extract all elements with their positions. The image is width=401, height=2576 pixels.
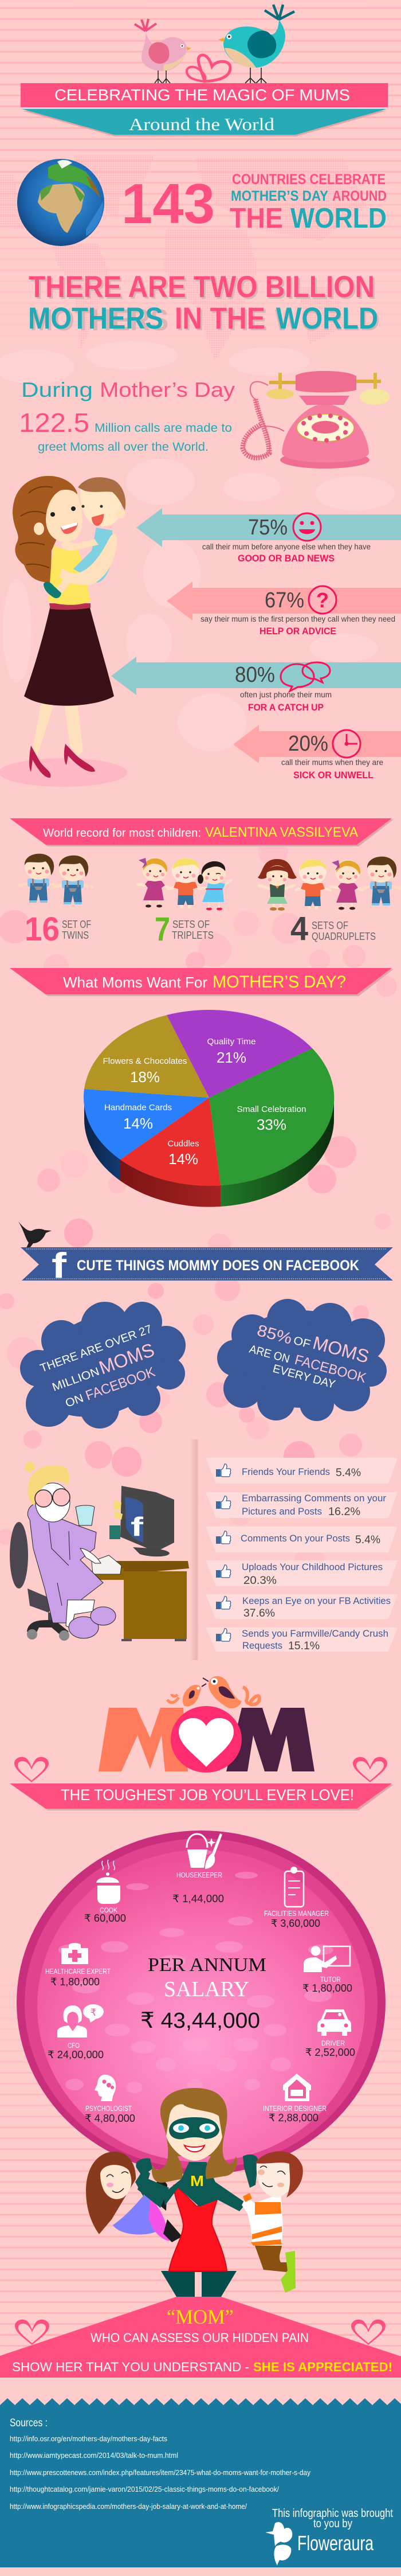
teal suit [163,2162,246,2211]
pie labels: 33% [257,1116,286,1133]
cloud: 27 million moms: FACEBOOK [84,1364,157,1404]
ribbon: world record [10,818,394,846]
statistic: 16 sets of twins: TWINS [62,930,89,941]
job: cook [84,1860,126,1924]
item: embarrassing comments: 16.2% [328,1506,360,1518]
bottom pyramid banner: SHE IS APPRECIATED! [253,2360,392,2374]
pie labels: Quality Time [207,1037,255,1047]
slice: cuddles [120,1098,221,1186]
cloud: 85 percent of moms: ARE ON [248,1343,291,1365]
icon: bottom heart right [351,2320,386,2345]
statistic: 16 sets of twins: SET OF [62,919,91,930]
pie labels: 14% [168,1150,198,1168]
pie labels [103,1037,306,1168]
letter M: M [190,2172,204,2189]
item: uploads childhood pictures: Uploads Your Childhood Pictures [242,1562,383,1572]
belt [49,603,91,610]
text block: mother's day calls: During [21,378,93,401]
pen cup [109,1525,120,1539]
skirt [24,606,114,706]
ribbon: facebook heading: f [52,1246,66,1286]
job: facilities manager: ₹ 3,60,000 [271,1918,320,1929]
shoes shadow [0,758,127,787]
job: interior designer [263,2074,327,2124]
job: facilities manager: FACILITIES MANAGER [264,1909,329,1918]
sources list: http://www.prescottenews.com/index.php/features/item/23475-what-do-moms-want-for-mother-s-day [10,2468,310,2477]
item: friends your friends: 5.4% [336,1467,361,1479]
slice: quality time [167,1010,312,1098]
callout: 20 percent [233,725,401,780]
item: embarrassing comments: Pictures and Posts [242,1506,322,1517]
job: tutor: ₹ 1,80,000 [302,1982,352,1994]
long hair [152,2088,237,2183]
job: facilities manager [264,1867,329,1929]
job: healthcare expert: ₹ 1,80,000 [50,1976,100,1988]
statistic: 143 countries: AROUND [332,188,387,204]
robe folds [49,1523,70,1606]
small bird [167,1684,206,1706]
pie side walls [84,1098,334,1207]
chair [10,1522,69,1641]
job: CFO: ₹ [91,2007,96,2018]
monitor: f [131,1512,144,1541]
ribbon: what moms want: What Moms Want For [63,974,207,991]
statistic: 4 sets of quadruplets: QUADRUPLETS [312,931,376,942]
sources list: http://www.iamtypecast.com/2014/03/talk-to-mum.html [10,2451,178,2460]
cloud: 85 percent of moms: MOMS [310,1332,371,1367]
ribbon: what moms want: MOTHER’S DAY? [213,973,346,992]
callout: 80 percent: often just phone their mum [240,690,332,699]
child's head [80,479,121,526]
item: uploads childhood pictures [206,1560,398,1587]
brand credit: Floweraura [297,2531,374,2555]
salary total: ₹ 43,44,000 [140,2009,260,2033]
icon: globe [17,159,104,246]
job: CFO: CFO [68,2042,80,2050]
job: cook: ₹ 60,000 [84,1913,126,1924]
cloud: 27 million moms [19,1294,187,1435]
salary total [140,1954,266,2033]
O with heart [171,1706,242,1773]
statistic: 4 sets of quadruplets [290,910,376,947]
item: keeps an eye [206,1594,398,1619]
callout: 75 percent: 75% [248,516,288,540]
right M [226,1708,314,1771]
statistic: 143 countries: WORLD [290,203,387,234]
arms [60,534,117,585]
job: tutor [302,1946,352,1994]
ribbon: facebook heading [21,1246,393,1286]
subtitle ribbon [22,109,387,136]
hair [13,476,77,583]
panel: facebook list [206,1458,398,1652]
disc texture [58,1849,333,2093]
callout: 75 percent [136,508,401,564]
callout: 67 percent [167,581,401,637]
statistic: 143 countries: MOTHER’S DAY [231,188,328,204]
item: comments on your posts: 5.4% [355,1534,380,1546]
item: embarrassing comments [206,1492,398,1518]
job: housekeeper: ₹ 1,44,000 [172,1893,224,1904]
item: sends requests [206,1627,398,1652]
mask [169,2117,219,2139]
keyboard [92,1555,121,1574]
statistic: 143 countries: THE [230,203,283,234]
job: interior designer: ₹ 2,88,000 [269,2112,319,2124]
callout: 67 percent: HELP OR ADVICE [260,626,336,637]
icon: clock [333,730,360,758]
sources list: http://www.infographicspedia.com/mothers-day-job-salary-at-work-and-at-home/ [10,2502,247,2511]
pie labels: Handmade Cards [104,1103,172,1113]
sources list: Sources : [10,2417,48,2429]
bottom pyramid banner: WHO CAN ASSESS OUR HIDDEN PAIN [91,2331,309,2345]
statistic: 7 sets of triplets: 7 [155,911,170,948]
job: healthcare expert: HEALTHCARE EXPERT [45,1967,111,1976]
cloud: 27 million moms: ON [64,1392,85,1410]
glasses [35,1489,70,1507]
smile [184,2145,205,2152]
shirt [48,545,91,605]
robe [27,1504,103,1623]
illustration: triplets [137,857,231,911]
statistic: 4 sets of quadruplets: SETS OF [312,920,348,931]
job: driver [305,2009,355,2058]
callout: 20 percent: SICK OR UNWELL [293,770,374,780]
cloud: 85 percent of moms: OF [292,1334,312,1351]
arm left [137,2176,169,2208]
icon: question mark [309,586,336,614]
item: friends your friends: Friends Your Friends [242,1466,330,1477]
footer panel [0,2398,401,2567]
job: cook: COOK [100,1906,117,1914]
job: housekeeper: HOUSEKEEPER [176,1871,222,1879]
icon: heart right [353,1757,387,1782]
job: driver: ₹ 2,52,000 [305,2047,355,2058]
legs and shoes [29,702,95,778]
callout: 80 percent: 80% [235,663,275,687]
dotted world map [0,155,367,361]
child's body [73,528,113,583]
headline: two billion mothers: THERE ARE TWO BILLION [29,270,375,304]
ribbon: facebook heading: CUTE THINGS MOMMY DOES ON FACEBOOK [77,1258,359,1274]
item: keeps an eye: 37.6% [243,1607,275,1619]
statistic: 143 countries: 143 [121,172,215,235]
icon: heart left [14,1757,49,1782]
brand credit: to you by [313,2518,352,2530]
item: sends requests: 15.1% [288,1640,320,1652]
sources list: http://info.osr.org/en/mothers-day/mothers-day-facts [10,2434,167,2443]
bottom pyramid banner: SHOW HER THAT YOU UNDERSTAND - [12,2360,249,2374]
ribbon: what moms want [10,968,394,996]
subtitle ribbon: Around the World [129,114,275,134]
callout: 80 percent [111,657,401,713]
pink bird [135,19,191,83]
girl on the left [86,2152,182,2242]
ribbon: toughest job: THE TOUGHEST JOB YOU’LL EVER LOVE! [61,1786,354,1804]
headline: two billion mothers: IN THE [175,302,265,335]
text block: mother's day calls [19,378,235,454]
callout: 67 percent: say their mum is the first person they call when they need [200,615,395,623]
job: psychologist: ₹ 4,80,000 [85,2113,135,2124]
job: psychologist: PSYCHOLOGIST [85,2104,132,2113]
icon: chat bubbles [281,662,330,691]
child's leg and shoe [56,573,76,594]
bunny slippers [69,1607,116,1638]
pie labels: Small Celebration [237,1104,306,1114]
red dress and legs [161,2185,237,2297]
text block: mother's day calls: 122.5 [19,408,89,438]
illustration: two birds and hearts [135,5,294,83]
cloud: 27 million moms: MILLION [50,1365,101,1394]
statistic: 4 sets of quadruplets: 4 [290,910,308,947]
desk [92,1561,189,1641]
face [166,2104,222,2161]
sources list [10,2417,310,2511]
callout: 67 percent: 67% [265,588,304,612]
statistic: 16 sets of twins [25,911,91,948]
callout: 20 percent: call their mums when they are [281,758,383,767]
icon: pink telephone [243,371,390,469]
salary total: PER ANNUM [148,1954,266,1976]
job: CFO [48,2004,104,2060]
job: housekeeper [172,1833,224,1904]
cloud: 85 percent of moms: FACEBOOK [293,1352,368,1386]
face [46,490,82,542]
illustration: quadruplets [258,857,400,911]
title banner [21,83,388,107]
pie labels: 18% [130,1068,160,1086]
item: sends requests: Requests [242,1640,282,1651]
item: keeps an eye: Keeps an Eye on your FB Activities [242,1595,391,1606]
boy on the right [242,2151,303,2293]
item: embarrassing comments: Embarrassing Comments on your [242,1493,386,1504]
statistic: 7 sets of triplets: SETS OF [172,919,210,930]
divider shadow [189,1439,199,1660]
slice: small celebration [209,1048,334,1185]
statistic: 7 sets of triplets: TRIPLETS [172,930,214,941]
ribbon: world record: VALENTINA VASSILYEVA [205,825,358,840]
job: psychologist [85,2075,135,2124]
statistic: 143 countries [121,171,387,235]
large bird [203,1676,260,1708]
ribbon: world record: World record for most children: [43,827,201,840]
callout: 80 percent: FOR A CATCH UP [248,702,324,713]
headline: two billion mothers: MOTHERS [28,302,163,335]
item: sends requests: Sends you Farmville/Candy Crush [242,1628,388,1639]
sources list: http://thoughtcatalog.com/jamie-varon/2015/02/25-classic-things-moms-do-on-facebook/ [10,2485,279,2493]
monitor [120,1486,174,1556]
teal bird [218,5,294,83]
mug [76,1505,95,1525]
salary total: SALARY [164,1977,249,2001]
headline: two billion mothers: WORLD [276,302,378,335]
icon: black bird [18,1221,52,1248]
background stripes bottom [0,2028,401,2356]
grandma head [36,1483,70,1522]
damask texture [0,341,395,751]
icon: bottom heart left [15,2320,49,2345]
bokeh circles [0,837,397,1575]
icon: question mark: ? [316,588,329,612]
logo: MOM with birds [99,1676,314,1773]
sticky notes [113,1500,123,1520]
left M [99,1708,188,1771]
pie labels: 14% [123,1115,153,1132]
title banner: CELEBRATING THE MAGIC OF MUMS [54,86,350,104]
job: driver: DRIVER [321,2039,345,2047]
cloud: 85 percent of moms [217,1299,387,1421]
text block: mother's day calls: Mother’s Day [100,378,235,401]
background stripes top [0,7,401,282]
gloves [243,2155,258,2188]
illustration: twins [19,854,92,904]
legs [66,1600,95,1629]
illustration: super mom with kids [86,2088,303,2297]
pie labels: 21% [217,1049,246,1066]
icon: smiley [293,513,321,541]
linked hearts [187,55,230,81]
pie labels: Flowers & Chocolates [103,1056,187,1066]
slice: handmade cards [84,1089,209,1160]
cloud: 85 percent of moms: 85% [255,1321,294,1348]
panel: salary disc [17,1830,386,2175]
item: uploads childhood pictures: 20.3% [243,1575,277,1587]
job: interior designer: INTERIOR DESIGNER [263,2104,327,2113]
pie labels: Cuddles [167,1139,199,1149]
job: tutor: TUTOR [320,1975,341,1984]
callout: 20 percent: 20% [288,732,328,756]
cloud: 27 million moms: THERE ARE OVER 27 [38,1323,154,1375]
statistic: 7 sets of triplets [155,911,214,948]
cloud: 27 million moms: MOMS [96,1339,157,1379]
icon: flower logo [265,2522,292,2566]
item: comments on your posts: Comments On your Posts [241,1533,350,1544]
illustration: mother hugging child [0,476,127,787]
illustration: grandma at computer [10,1462,189,1641]
headline: two billion mothers [28,270,380,337]
callout: 75 percent: GOOD OR BAD NEWS [238,553,335,564]
statistic: 16 sets of twins: 16 [25,911,60,948]
text block: mother's day calls: Million calls are made to [95,421,232,435]
callout: 75 percent: call their mum before anyone else when they have [202,542,371,551]
brand credit [265,2507,393,2566]
pie chart [84,1010,334,1207]
item: comments on your posts [206,1527,398,1552]
text block: mother's day calls: greet Moms all over the World. [38,440,209,454]
bottom pyramid banner [0,2297,401,2378]
cloud: 85 percent of moms: EVERY DAY [272,1363,337,1391]
job: healthcare expert [45,1943,111,1988]
ribbon: toughest job [10,1783,394,1810]
job: CFO: ₹ 24,00,000 [48,2049,104,2060]
hand [80,1548,101,1563]
slice: flowers and chocolates [84,1015,209,1098]
item: friends your friends [206,1458,398,1484]
bottom pyramid banner: “MOM” [167,2305,234,2328]
